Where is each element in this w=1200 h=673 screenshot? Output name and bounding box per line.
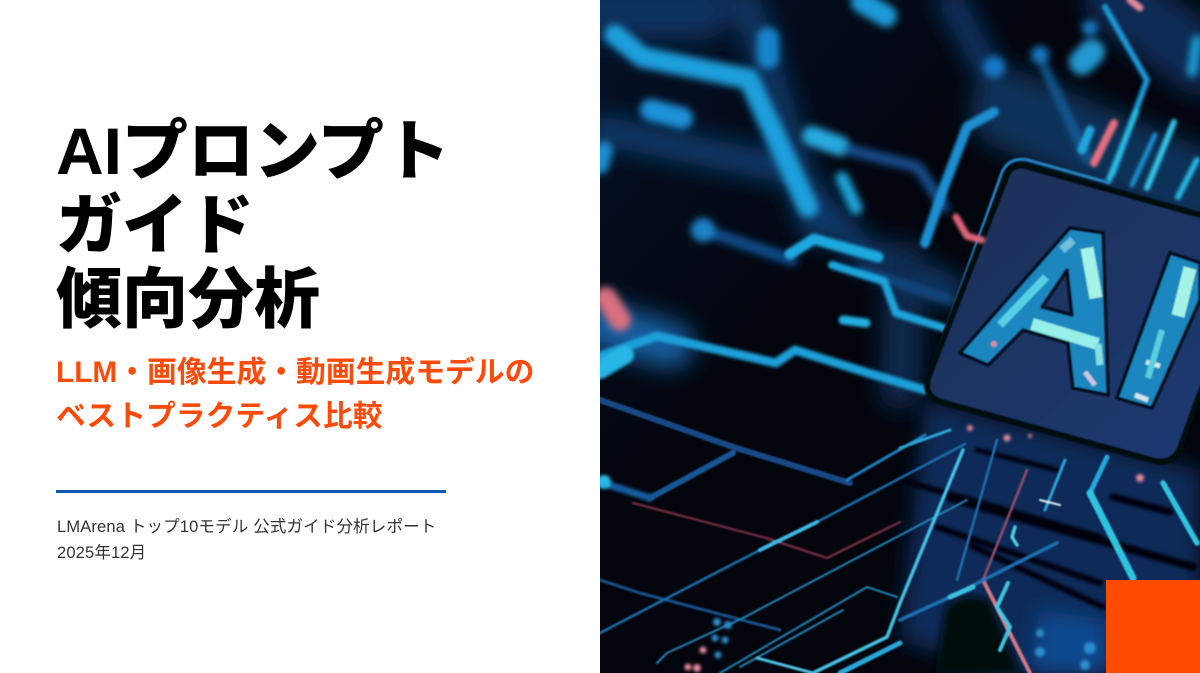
subtitle: LLM・画像生成・動画生成モデルの	[56, 356, 534, 389]
title	[56, 114, 450, 336]
report source and date: 2025年12月	[57, 544, 146, 562]
title: ガイド	[56, 188, 254, 262]
lower right board	[900, 400, 1200, 673]
title: AIプロンプト	[56, 114, 450, 188]
blurred cyan traces	[600, 2, 1197, 320]
divider rule	[56, 490, 446, 493]
subtitle: ベストプラクティス比較	[56, 400, 383, 433]
chip body	[925, 159, 1200, 462]
thin circuit lines	[600, 400, 1197, 673]
chip letter I	[1117, 253, 1200, 408]
report source and date	[57, 518, 436, 562]
background haze	[600, 0, 1200, 390]
dark board bands	[900, 450, 1193, 607]
pink trace at chip corner	[956, 217, 982, 240]
chip letter A	[960, 228, 1108, 395]
orange corner accent	[1106, 580, 1200, 673]
subtitle	[56, 356, 534, 433]
report source and date: LMArena トップ10モデル 公式ガイド分析レポート	[57, 518, 436, 536]
photo: AI chip circuit board	[600, 0, 1200, 673]
title: 傾向分析	[56, 262, 320, 336]
component dots	[684, 425, 1144, 672]
sharper cyan traces	[597, 0, 1197, 498]
